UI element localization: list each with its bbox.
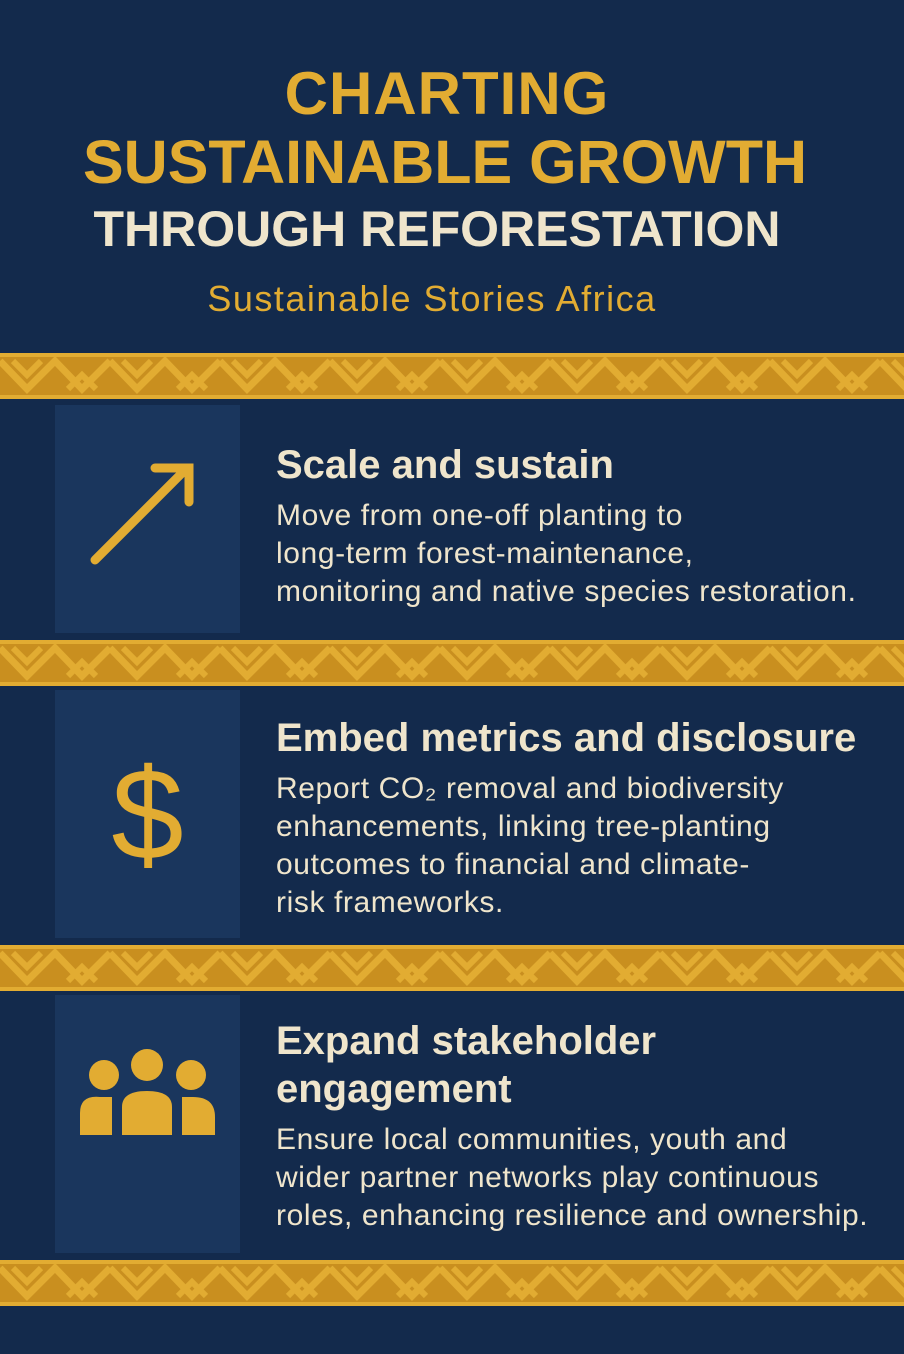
- heading: engagement: [276, 1067, 512, 1111]
- panel: scale and sustain: [55, 405, 857, 633]
- icon: dollar: $: [111, 741, 184, 887]
- title: [83, 60, 807, 257]
- heading: [276, 1019, 656, 1111]
- text: Move from one-off planting to: [276, 499, 683, 532]
- subtitle: Sustainable Stories Africa: [207, 278, 657, 319]
- text: risk frameworks.: [276, 886, 504, 919]
- text: Report CO₂ removal and biodiversity: [276, 772, 784, 805]
- band 1: [0, 353, 904, 399]
- panel: metrics: [55, 690, 856, 938]
- band 2: [0, 640, 904, 686]
- icon: people: [55, 995, 240, 1253]
- heading: Scale and sustain: [276, 443, 614, 487]
- text: enhancements, linking tree-planting: [276, 810, 771, 843]
- title: THROUGH REFORESTATION: [93, 201, 780, 257]
- heading: Expand stakeholder: [276, 1019, 656, 1063]
- text: [276, 499, 857, 608]
- text: monitoring and native species restoration.: [276, 575, 857, 608]
- text: long-term forest-maintenance,: [276, 537, 694, 570]
- heading: Embed metrics and disclosure: [276, 716, 856, 760]
- icon: arrow: [55, 405, 240, 633]
- text: [276, 1123, 868, 1232]
- text: outcomes to financial and climate-: [276, 848, 750, 881]
- panel: stakeholders: [55, 995, 868, 1253]
- icon: dollar: [55, 690, 240, 938]
- text: wider partner networks play continuous: [276, 1161, 819, 1194]
- text: [276, 772, 784, 919]
- title: CHARTING: [285, 60, 609, 127]
- band 3: [0, 945, 904, 991]
- title: SUSTAINABLE GROWTH: [83, 128, 807, 196]
- text: Ensure local communities, youth and: [276, 1123, 787, 1156]
- band 4: [0, 1260, 904, 1306]
- text: roles, enhancing resilience and ownership.: [276, 1199, 868, 1232]
